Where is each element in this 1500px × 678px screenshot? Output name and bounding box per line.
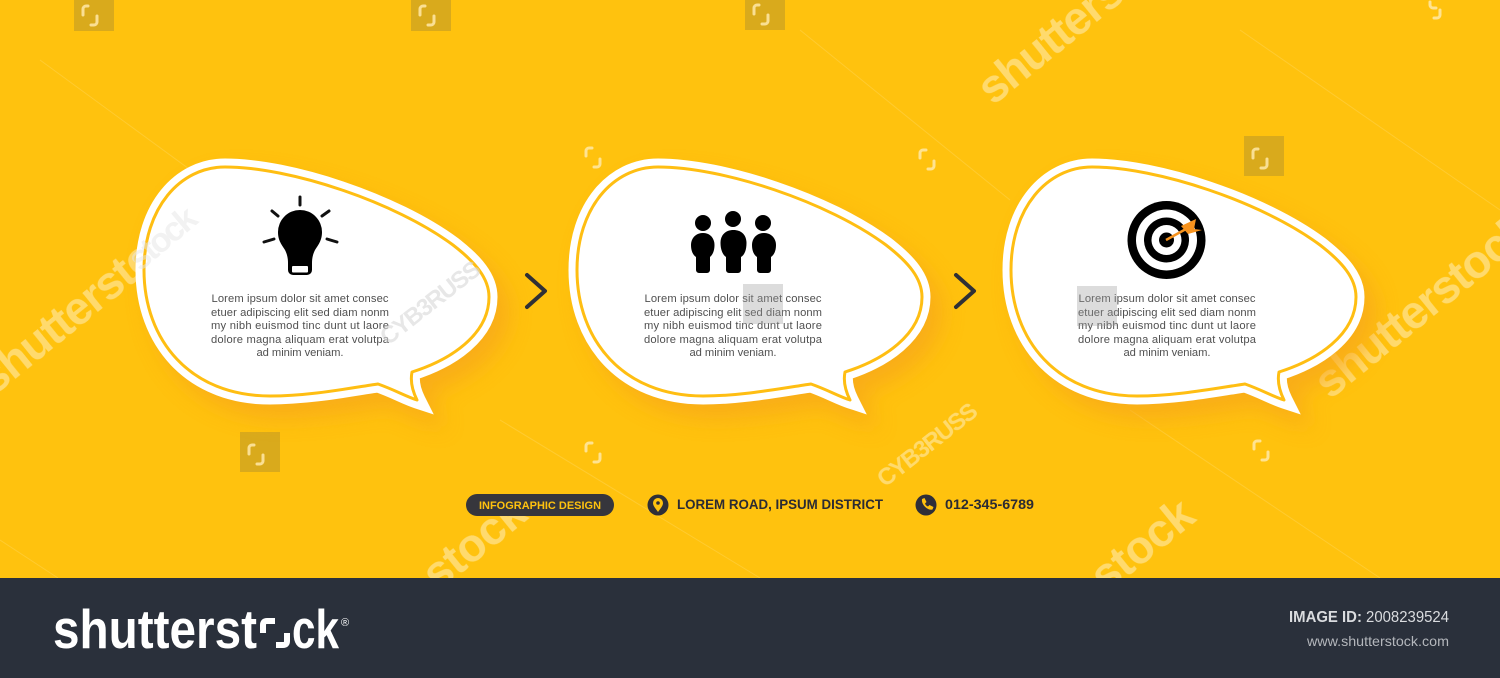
bubble 3 text: dolore magna aliquam erat volutpa [1078, 334, 1257, 346]
bubble 1 shape [144, 167, 489, 400]
footer logo: ® [341, 617, 349, 629]
arrow 2 [956, 275, 974, 307]
bubble 2 text: dolore magna aliquam erat volutpa [644, 334, 823, 346]
icon: phone [916, 494, 936, 516]
bubble 1 text: my nibh euismod tinc dunt ut laore [211, 320, 389, 332]
pill: infographic design [466, 494, 614, 516]
watermark layer: marks over bubbles: stock [121, 199, 205, 278]
footer logo: shutterst [53, 598, 257, 660]
bubble 2 text: Lorem ipsum dolor sit amet consec [644, 293, 822, 305]
footer logo: ck [292, 598, 339, 660]
bubble 2 text: my nibh euismod tinc dunt ut laore [644, 320, 822, 332]
watermark layer: background marks: CYB3RUSS [872, 398, 983, 493]
icon: light bulb [264, 197, 337, 275]
watermark layer: background marks: stock [1080, 487, 1204, 602]
bubble 2 outline [577, 167, 922, 400]
bubble 3 text: my nibh euismod tinc dunt ut laore [1078, 320, 1256, 332]
arrow 1 [527, 275, 545, 307]
bubble 2 shape [577, 167, 922, 400]
bubble 3 outline [1011, 167, 1356, 400]
phone number: 012-345-6789 [945, 496, 1034, 512]
bubble 2 shadow [589, 181, 934, 414]
watermark layer: marks over bubbles [121, 199, 1117, 351]
bubble 2 text: etuer adipiscing elit sed diam nonm [644, 307, 822, 319]
bubble 3 text [1078, 293, 1257, 359]
watermark layer: background marks: stock [412, 485, 536, 600]
bubble 1 shadow [156, 181, 501, 414]
bubble 3 text: ad minim veniam. [1124, 347, 1210, 359]
icon: target with arrow [1128, 201, 1206, 279]
bubble 1 outline [144, 167, 489, 400]
bubble 1 text: dolore magna aliquam erat volutpa [211, 334, 390, 346]
icon: location pin [648, 494, 668, 516]
bubble 3 shadow [1023, 181, 1368, 414]
bubble 1 text [211, 293, 390, 359]
bubble 2 text: ad minim veniam. [690, 347, 776, 359]
panel: speech bubble 1 [144, 167, 501, 414]
bubble 2 text [644, 293, 823, 359]
bubble 1 text: Lorem ipsum dolor sit amet consec [212, 293, 389, 305]
panel: speech bubble 3 [1011, 167, 1368, 414]
panel: speech bubble 2 [577, 167, 934, 414]
pill: infographic design: INFOGRAPHIC DESIGN [479, 500, 601, 512]
image id: IMAGE ID: 2008239524 [1289, 609, 1449, 626]
watermark layer: marks over bubbles: CYB3RUSS [375, 256, 486, 351]
bubble 3 shape [1011, 167, 1356, 400]
bubble 3 text: etuer adipiscing elit sed diam nonm [1078, 307, 1256, 319]
contact strip [466, 494, 1034, 516]
bubble 1 text: etuer adipiscing elit sed diam nonm [211, 307, 389, 319]
website: www.shutterstock.com [1306, 633, 1449, 649]
icon: three people [691, 211, 776, 273]
bubble 3 text: Lorem ipsum dolor sit amet consec [1078, 293, 1256, 305]
footer bar [0, 578, 1500, 678]
bubble 1 text: ad minim veniam. [256, 347, 344, 359]
address: LOREM ROAD, IPSUM DISTRICT [677, 496, 883, 512]
